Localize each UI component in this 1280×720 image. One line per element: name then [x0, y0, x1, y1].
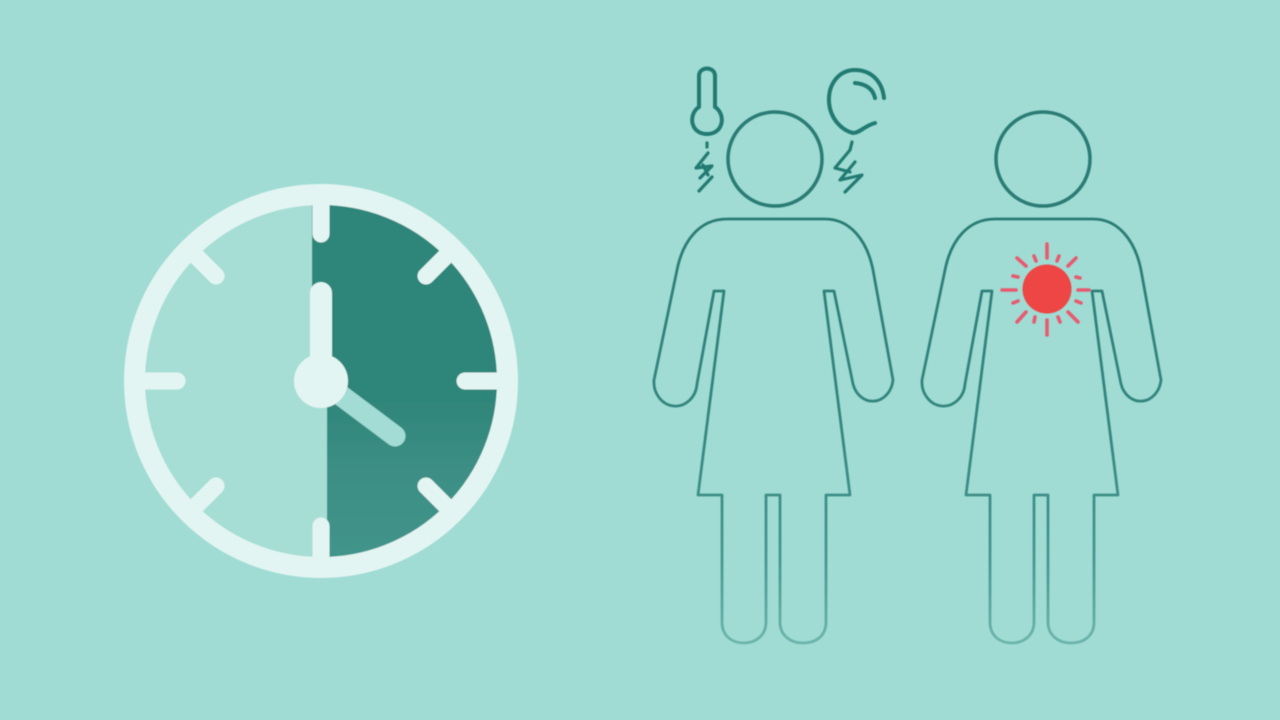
icon: light bulb	[829, 70, 884, 192]
bulb highlight	[855, 83, 875, 98]
artwork with soft edges	[134, 68, 1161, 643]
squiggle under bulb	[835, 142, 862, 192]
icon: thermometer	[692, 68, 722, 191]
burst rays	[1002, 244, 1089, 335]
infographic scene	[124, 66, 1164, 645]
body outline	[922, 219, 1161, 643]
head	[728, 112, 822, 206]
clock hour ticks	[140, 198, 502, 562]
clock minute hand	[310, 293, 332, 381]
clock face: light half	[144, 204, 498, 558]
clock centre hub	[294, 354, 348, 408]
figure: left person with symptoms	[654, 112, 893, 643]
clock hour hand	[335, 391, 395, 436]
head	[996, 112, 1090, 206]
clock outer ring	[134, 194, 508, 568]
clock face: dark half	[312, 204, 498, 558]
icon: red chest pain burst	[1002, 244, 1089, 335]
burst core	[1022, 264, 1072, 314]
body outline	[654, 219, 893, 643]
squiggle under thermometer	[696, 143, 712, 191]
figure: right person with chest pain	[922, 112, 1161, 643]
icon: clock	[134, 194, 520, 568]
